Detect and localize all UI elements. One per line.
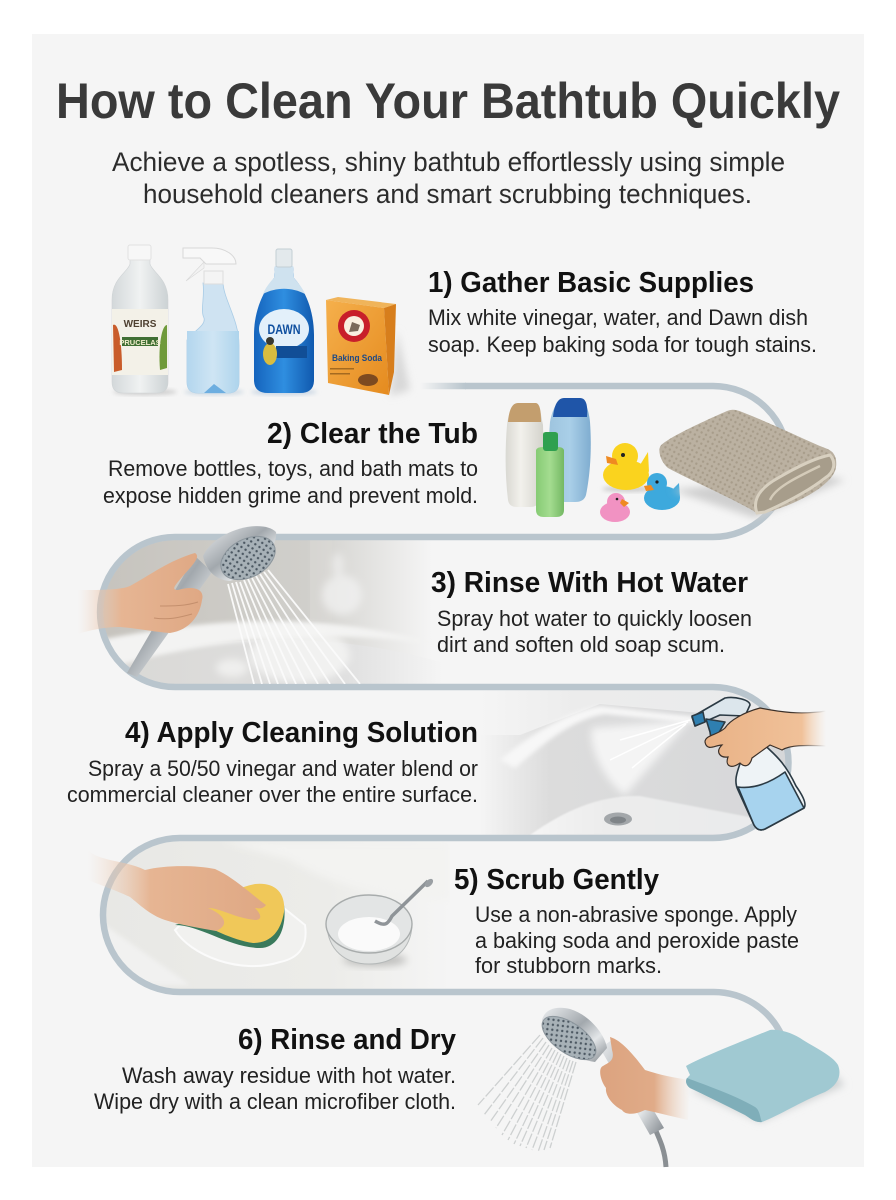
step 3: text: 3) Rinse With Hot Water <box>431 567 748 599</box>
step 4: text: Spray a 50/50 vinegar and water blend or <box>88 756 478 781</box>
icon: hose <box>652 1122 666 1167</box>
serpentine connector line <box>100 386 788 1036</box>
icon: vinegar bottle <box>112 245 177 395</box>
icon: dawn dish soap <box>251 249 317 395</box>
step 4: text: commercial cleaner over the entire surface. <box>67 782 478 807</box>
water spray <box>228 570 360 684</box>
step 4: text: 4) Apply Cleaning Solution <box>125 717 478 749</box>
icon: shower handle <box>600 1040 664 1135</box>
step 5: text: 5) Scrub Gently <box>454 864 659 896</box>
icon: blue rubber duck <box>644 473 680 510</box>
icon: pink rubber duck <box>600 493 630 522</box>
icon: shower head chrome <box>127 526 283 677</box>
icon: hand <box>600 1037 690 1120</box>
step 2: text: 2) Clear the Tub <box>267 418 478 450</box>
step 5: text: for stubborn marks. <box>475 953 662 978</box>
icon: bowl of paste <box>326 877 435 966</box>
step 5: text: Use a non-abrasive sponge. Apply <box>475 902 797 927</box>
panel: step 3 photo backdrop <box>103 540 408 684</box>
step 6: text: 6) Rinse and Dry <box>238 1024 456 1056</box>
icon: yellow rubber duck <box>602 443 654 492</box>
title: How to Clean Your Bathtub Quickly <box>56 73 840 129</box>
spray streaks <box>610 720 690 768</box>
icon: folded bath mat <box>659 410 845 518</box>
icon: baking soda box <box>326 297 410 396</box>
icon: hand <box>78 553 203 634</box>
step 6: shower head and towel <box>478 1008 845 1167</box>
step 2: text: Remove bottles, toys, and bath mats to <box>108 456 478 481</box>
panel: step 5 photo backdrop <box>106 842 368 988</box>
step 2: text: expose hidden grime and prevent mold. <box>103 483 478 508</box>
subtitle <box>112 147 785 209</box>
icon: hand <box>88 850 266 931</box>
step 5: text: a baking soda and peroxide paste <box>475 928 799 953</box>
step 4: spray bottle, mist and drain <box>591 697 826 830</box>
step 3: text: Spray hot water to quickly loosen <box>437 606 752 631</box>
icon: hand <box>705 708 826 766</box>
icon: dawn dish soap: DAWN <box>268 322 300 337</box>
mist <box>591 720 690 795</box>
step 1: text <box>428 267 817 357</box>
step 3: text: dirt and soften old soap scum. <box>437 632 725 657</box>
step 1: text: soap. Keep baking soda for tough stains. <box>428 332 817 357</box>
step 3: text <box>431 567 752 657</box>
step 5: text <box>454 864 799 978</box>
step 1: supplies illustration <box>112 245 410 396</box>
step 6: text <box>94 1024 456 1114</box>
icon: microfiber towel <box>686 1030 845 1122</box>
icon: drain <box>604 812 632 826</box>
icon: bottle <box>692 697 805 830</box>
icon: shampoo bottles <box>506 398 591 517</box>
subtitle: Achieve a spotless, shiny bathtub effortlessly using simple <box>112 147 785 177</box>
step 2: text <box>103 418 478 508</box>
step 4: text <box>67 717 478 807</box>
step 3: hand, shower head, steam <box>78 526 362 684</box>
water spray <box>478 1035 576 1152</box>
subtitle: household cleaners and smart scrubbing techniques. <box>143 179 752 209</box>
panel: step 4 photo backdrop <box>503 690 786 835</box>
icon: vinegar bottle: WEIRS <box>124 319 157 330</box>
step 6: text: Wipe dry with a clean microfiber cloth. <box>94 1089 456 1114</box>
icon: baking soda box: Baking Soda <box>332 353 383 364</box>
icon: shower head <box>535 1008 607 1068</box>
icon: spray bottle <box>183 248 244 395</box>
step 5: hand, sponge and bowl <box>88 850 435 966</box>
icon: sponge <box>175 884 285 948</box>
step 6: text: Wash away residue with hot water. <box>122 1063 456 1088</box>
step 2: bottles, ducks and bath mat <box>506 398 845 522</box>
step 1: text: Mix white vinegar, water, and Dawn dish <box>428 305 808 330</box>
suds <box>175 905 306 966</box>
steam <box>216 553 362 683</box>
step 1: text: 1) Gather Basic Supplies <box>428 267 754 299</box>
icon: vinegar bottle: PRUCELAS <box>119 338 161 347</box>
